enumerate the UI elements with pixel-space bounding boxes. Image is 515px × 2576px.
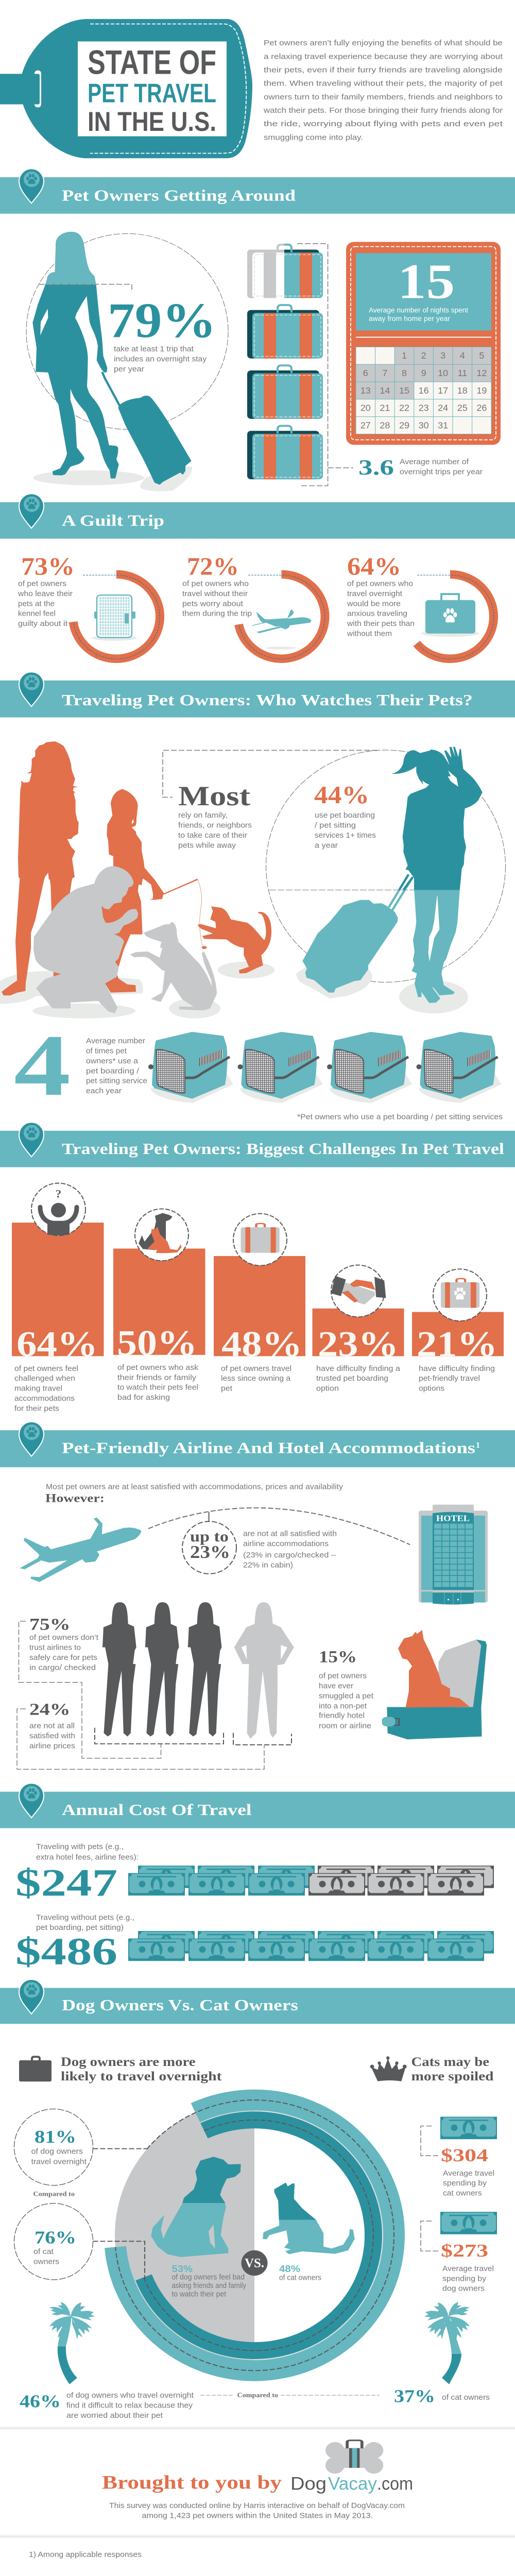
stat: 15 percent smuggled: friendly hotel: [319, 1711, 365, 1720]
guilt stat: 73 percent with kennel: [18, 552, 160, 659]
stat: 24 percent: 24%: [29, 1700, 71, 1719]
callout: 44 percent use pet boarding: a year: [315, 841, 338, 850]
guilt stat: 73 percent with kennel: who leave their: [18, 589, 73, 598]
stat: 46 percent compared to 37 percent: [20, 2386, 490, 2420]
stat: 53 percent of dog owners: asking friends and family: [172, 2281, 246, 2290]
luggage tag title: IN THE U.S.: [88, 107, 216, 137]
subheading: cats may be more spoiled: [370, 2055, 494, 2083]
label: compared to: Compared to: [33, 2190, 75, 2197]
intro text: their pets, even if their furry friends are traveling alongside: [264, 66, 503, 74]
callout: 44 percent use pet boarding: 44%: [314, 781, 369, 809]
guilt stat: 72 percent with plane: them during the trip: [182, 609, 252, 618]
guilt stat: 64 percent with pet carrier: 64%: [347, 552, 401, 580]
cat owners spending: 304 dollars: Average travel: [443, 2169, 494, 2178]
survey methodology: [109, 2501, 405, 2520]
callout: 76 percent of cat owners: 76%: [35, 2227, 76, 2247]
guilt stat: 72 percent with plane: [182, 552, 325, 659]
bar: 23 percent trusted boarding: have difficulty finding a: [316, 1364, 401, 1373]
stat: 15 percent smuggled: into a non-pet: [319, 1702, 367, 1710]
stat: 4 pet boarding uses: each year: [86, 1087, 122, 1095]
section heading: annual cost of travel: Annual Cost Of Travel: [62, 1801, 252, 1819]
callout: 81 percent of dog owners: 81%: [35, 2126, 76, 2147]
callout: 81 percent of dog owners: of dog owners: [31, 2147, 83, 2156]
calendar: 15 nights: 24: [438, 403, 448, 413]
stat: 15 percent smuggled: 15%: [319, 1648, 357, 1667]
stat: 79 percent: includes an overnight stay: [114, 355, 207, 363]
section heading: airline and hotel accommodations: 1: [476, 1441, 480, 1450]
calendar: 15 nights: 11: [457, 368, 467, 378]
bar: 48 percent travel less: of pet owners travel: [221, 1364, 291, 1373]
palm tree right: [424, 2302, 470, 2384]
subheading: cats may be more spoiled: more spoiled: [411, 2069, 494, 2083]
bar: 50 percent feel bad asking: [113, 1209, 205, 1402]
calendar: 15 nights: 19: [476, 385, 487, 396]
stat: 75 percent: trust airlines to: [29, 1643, 81, 1652]
calendar: 15 nights: 6: [363, 368, 368, 378]
bar: 50 percent feel bad asking: of pet owners who ask: [117, 1363, 198, 1372]
intro: however: [45, 1483, 343, 1505]
icon: airplane: [20, 1518, 141, 1582]
calendar: 15 nights: 27: [360, 420, 371, 430]
four pet crates: [148, 1032, 502, 1103]
stat: 53 percent of dog owners: of dog owners feel bad: [172, 2273, 245, 2281]
stat: 4 pet boarding uses: owners* use a: [86, 1057, 139, 1065]
guilt stat: 64 percent with pet carrier: travel overnight: [347, 589, 403, 598]
credit: brought to you by dogvacay: Brought to you by: [102, 2472, 282, 2493]
dog owners spending: 273 dollars: $273: [441, 2241, 488, 2261]
calendar: 15 nights: 20: [360, 403, 371, 413]
subheading: dog owners travel overnight: likely to travel overnight: [61, 2069, 222, 2083]
intro text: Pet owners aren’t fully enjoying the benefits of what should be: [264, 39, 503, 47]
stat: 46 percent compared to 37 percent: of cat owners: [442, 2393, 490, 2402]
guilt stat: 72 percent with plane: of pet owners who: [182, 580, 249, 588]
callout: 76 percent of cat owners: of cat: [33, 2247, 54, 2256]
guilt stat: 64 percent with pet carrier: of pet owners who: [347, 580, 413, 588]
section heading: dog owners vs cat owners: Dog Owners Vs. Cat Owners: [62, 1996, 298, 2014]
stat: 15 percent smuggled: [319, 1648, 374, 1731]
bar: 23 percent trusted boarding: trusted pet boarding: [316, 1374, 388, 1383]
calendar: 15 nights: [346, 242, 501, 445]
section heading: pet owners getting around: [0, 169, 515, 214]
stat: 15 percent smuggled: smuggled a pet: [319, 1692, 374, 1700]
guilt stat: 73 percent with kennel: pets at the: [18, 600, 55, 608]
calendar: 15 nights: 5: [479, 350, 485, 361]
stat: 79 percent: 79%: [108, 293, 216, 348]
bar: 50 percent feel bad asking: their friends or family: [117, 1374, 196, 1382]
intro: however: However:: [45, 1492, 105, 1505]
stat: 15 percent smuggled: have ever: [319, 1682, 353, 1690]
stat: 53 percent of dog owners: [172, 2263, 246, 2298]
calendar: 15 nights: Average number of nights spent: [369, 307, 468, 314]
section heading: annual cost of travel: [0, 1783, 515, 1828]
calendar: 15 nights: 4: [460, 350, 465, 361]
calendar: 15 nights: 22: [399, 403, 409, 413]
callout: 44 percent use pet boarding: services 1+ times: [315, 831, 376, 840]
bar: 21 percent pet-friendly options: options: [419, 1384, 444, 1393]
callout: most rely on family: friends, or neighbors: [178, 821, 252, 830]
callout: most rely on family: pets while away: [178, 841, 236, 850]
stat: 79 percent: per year: [114, 365, 144, 374]
calendar: 15 nights: 3: [440, 350, 445, 361]
survey methodology: This survey was conducted online by Harris interactive on behalf of DogVacay.com: [109, 2501, 405, 2510]
flight arc with up to 23 percent callout: [148, 1508, 410, 1574]
stat: 15 percent smuggled: room or airline: [319, 1722, 371, 1731]
calendar: 15 nights: 21: [380, 403, 390, 413]
stat: 4 pet boarding uses: 4: [14, 1017, 71, 1114]
intro text: them. When traveling without their pets, the majority of pet: [264, 79, 503, 88]
section heading: a guilt trip: A Guilt Trip: [62, 512, 164, 529]
luggage tag title: STATE OF: [88, 43, 216, 81]
stat: 3.6 trips: [358, 455, 483, 480]
icon: dog in open suitcase: [382, 1630, 487, 1739]
cost with pets: 247 dollars: [15, 1842, 494, 1904]
flight arc with up to 23 percent callout: airline accommodations: [243, 1539, 329, 1548]
stat: 46 percent compared to 37 percent: Compared to: [237, 2392, 278, 2399]
stat: 4 pet boarding uses: [14, 1017, 147, 1114]
guilt stat: 72 percent with plane: pets worry about: [182, 600, 244, 608]
guilt stat: 64 percent with pet carrier: [347, 552, 494, 659]
calendar: 15 nights: 31: [438, 420, 448, 430]
survey methodology: among 1,423 pet owners within the United States in May 2013.: [142, 2512, 373, 2520]
cost with pets: 247 dollars: Traveling with pets (e.g.,: [36, 1842, 124, 1851]
guilt stat: 73 percent with kennel: kennel feel: [18, 609, 56, 618]
calendar: 15 nights: 25: [457, 403, 468, 413]
luggage tag title: PET TRAVEL: [88, 78, 216, 108]
logo icon: bone suitcase: [325, 2441, 383, 2473]
intro text: owners turn to their family members, friends and neighbors to: [264, 93, 503, 101]
guilt stat: 73 percent with kennel: of pet owners: [18, 580, 66, 588]
bar: 64 percent challenged: [12, 1183, 104, 1413]
callout: 81 percent of dog owners: [14, 2109, 147, 2185]
callout: 44 percent use pet boarding: use pet boarding: [315, 811, 375, 820]
subheading: cats may be more spoiled: Cats may be: [411, 2055, 489, 2069]
bar: 23 percent trusted boarding: 23%: [318, 1325, 399, 1364]
stat: 24 percent: airline prices: [29, 1742, 75, 1750]
calendar: 15 nights: 7: [382, 368, 387, 378]
stat: 48 percent of cat owners: of cat owners: [279, 2274, 321, 2282]
cat owners spending: 304 dollars: [421, 2117, 497, 2198]
calendar: 15 nights: 2: [421, 350, 426, 361]
subheading: dog owners travel overnight: [19, 2055, 222, 2083]
calendar: 15 nights: 16: [419, 385, 429, 396]
cat owners spending: 304 dollars: spending by: [443, 2179, 487, 2188]
stat: 24 percent: are not at all: [29, 1722, 75, 1731]
calendar: 15 nights: 29: [399, 420, 409, 430]
bar: 50 percent feel bad asking: bad for asking: [117, 1393, 170, 1402]
section heading: a guilt trip: [0, 494, 515, 539]
bar: 50 percent feel bad asking: 50%: [117, 1324, 197, 1363]
stat: 24 percent: [29, 1700, 75, 1750]
calendar: 15 nights: 10: [438, 368, 448, 378]
stat: 75 percent: in cargo/ checked: [29, 1663, 96, 1672]
stat: 46 percent compared to 37 percent: 46%: [20, 2391, 61, 2411]
stat: 24 percent: satisfied with: [29, 1732, 75, 1740]
icon: hotel: [419, 1505, 488, 1604]
footnote: among applicable responses: 1) Among applicable responses: [29, 2550, 142, 2559]
bar: 64 percent challenged: ?: [56, 1188, 61, 1200]
cat owners spending: 304 dollars: cat owners: [443, 2189, 482, 2198]
footnote: pet owners: *Pet owners who use a pet boarding / pet sitting services: [297, 1113, 503, 1121]
stat: 75 percent: [29, 1615, 99, 1672]
callout: 81 percent of dog owners: travel overnight: [31, 2158, 87, 2166]
section heading: who watches their pets: Traveling Pet Owners: Who Watches Their Pets?: [62, 691, 473, 709]
stat: 53 percent of dog owners: to watch their pet: [172, 2290, 227, 2298]
stat: 48 percent of cat owners: [279, 2263, 321, 2282]
bar: 64 percent challenged: challenged when: [14, 1374, 75, 1383]
callout: most rely on family: to take care of their: [178, 831, 247, 840]
subheading: dog owners travel overnight: Dog owners are more: [61, 2055, 196, 2069]
calendar: 15 nights: 28: [380, 420, 390, 430]
bar: 64 percent challenged: for their pets: [14, 1404, 59, 1413]
section heading: pet owners getting around: Pet Owners Getting Around: [62, 187, 296, 204]
bar: 48 percent travel less: less since owning a: [221, 1374, 291, 1383]
calendar: 15 nights: 17: [438, 385, 448, 396]
callout: most rely on family: [163, 750, 377, 850]
circular chart: dog vs cat: [115, 2100, 394, 2370]
section heading: who watches their pets: [0, 672, 515, 717]
four women pictogram: [17, 1602, 294, 1769]
credit: brought to you by dogvacay: .com: [377, 2473, 413, 2494]
callout: 76 percent of cat owners: owners: [33, 2258, 59, 2266]
cost without pets: 486 dollars: $486: [15, 1930, 117, 1973]
intro: however: Most pet owners are at least satisfied with accommodations, prices and availability: [46, 1483, 343, 1491]
flight arc with up to 23 percent callout: up to: [190, 1529, 229, 1545]
guilt stat: 64 percent with pet carrier: without them: [347, 630, 392, 638]
flight arc with up to 23 percent callout: 23%: [190, 1542, 230, 1562]
guilt stat: 73 percent with kennel: guilty about it: [18, 619, 68, 628]
stat: 4 pet boarding uses: pet boarding /: [86, 1067, 140, 1075]
calendar: 15 nights: 15: [399, 385, 409, 396]
bar: 21 percent pet-friendly options: have difficulty finding: [419, 1364, 495, 1373]
bar: 50 percent feel bad asking: to watch their pets feel: [117, 1383, 198, 1392]
stat: 46 percent compared to 37 percent: are worried about their pet: [66, 2411, 163, 2420]
calendar: 15 nights: 26: [476, 403, 487, 413]
stat: 48 percent of cat owners: 48%: [279, 2263, 300, 2274]
stat: 4 pet boarding uses: Average number: [86, 1037, 145, 1045]
intro text: smuggling come into play.: [264, 133, 363, 142]
stat: 75 percent: safely care for pets: [29, 1653, 97, 1662]
guilt stat: 64 percent with pet carrier: would be more: [347, 600, 401, 608]
woman with rolling suitcase illustration: [26, 232, 228, 491]
stat: 75 percent: 75%: [29, 1615, 71, 1634]
intro text: the ride, worrying about flying with pets and even pet: [264, 120, 503, 128]
palm tree left: [49, 2302, 95, 2384]
calendar: 15 nights: away from home per year: [369, 315, 450, 323]
flight arc with up to 23 percent callout: (23% in cargo/checked –: [243, 1551, 336, 1560]
dog owners spending: 273 dollars: Average travel: [442, 2264, 494, 2273]
icon: hotel: HOTEL: [436, 1514, 470, 1523]
intro text: [263, 39, 503, 142]
section heading: airline and hotel accommodations: [0, 1422, 515, 1467]
bar: 48 percent travel less: 48%: [221, 1325, 302, 1364]
bar: 23 percent trusted boarding: option: [316, 1384, 339, 1393]
dog owners spending: 273 dollars: [421, 2212, 497, 2293]
calendar: 15 nights: 12: [476, 368, 487, 378]
calendar: 15 nights: 30: [419, 420, 429, 430]
stat: 53 percent of dog owners: 53%: [172, 2263, 193, 2274]
guilt stat: 64 percent with pet carrier: with their pets than: [347, 619, 415, 628]
stat: 15 percent smuggled: of pet owners: [319, 1672, 367, 1681]
calendar: 15 nights: 13: [360, 385, 371, 396]
stat: 4 pet boarding uses: pet sitting service: [86, 1077, 147, 1086]
calendar: 15 nights: 23: [419, 403, 429, 413]
family with pets illustration: [0, 741, 274, 1019]
bar: 21 percent pet-friendly options: [412, 1269, 504, 1393]
callout: most rely on family: Most: [178, 781, 251, 811]
calendar: 15 nights: 1: [402, 350, 407, 361]
dog owners spending: 273 dollars: dog owners: [442, 2284, 485, 2293]
stat: 75 percent: of pet owners don’t: [29, 1633, 99, 1642]
credit: brought to you by dogvacay: Dog: [290, 2473, 327, 2494]
section heading: biggest challenges: Traveling Pet Owners: Biggest Challenges In Pet Travel: [62, 1140, 504, 1158]
bar: 64 percent challenged: 64%: [16, 1325, 98, 1364]
cost with pets: 247 dollars: $247: [15, 1861, 117, 1904]
callout: 76 percent of cat owners: [14, 2204, 145, 2281]
cat owners spending: 304 dollars: $304: [441, 2145, 488, 2165]
suitcases: 3.6 overnight trips: [247, 244, 353, 486]
guilt stat: 73 percent with kennel: 73%: [21, 552, 75, 580]
stat: 3.6 trips: overnight trips per year: [400, 468, 483, 476]
credit: brought to you by dogvacay: Vacay: [328, 2473, 377, 2494]
stat: 46 percent compared to 37 percent: 37%: [394, 2386, 435, 2406]
stat: 79 percent: take at least 1 trip that: [114, 345, 194, 353]
stat: 46 percent compared to 37 percent: find it difficult to relax because they: [66, 2401, 193, 2410]
circular chart: dog vs cat: VS.: [245, 2256, 264, 2270]
bar: 48 percent travel less: pet: [221, 1384, 233, 1393]
calendar: 15 nights: 8: [402, 368, 407, 378]
guilt stat: 72 percent with plane: 72%: [187, 552, 239, 580]
credit: brought to you by dogvacay: [102, 2472, 413, 2494]
callout: most rely on family: rely on family,: [178, 811, 228, 820]
callout: 44 percent use pet boarding: / pet sitting: [315, 821, 356, 830]
intro text: watch their pets. For those bringing their furry friends along for: [263, 106, 503, 115]
stat: 3.6 trips: Average number of: [400, 457, 469, 466]
bar: 64 percent challenged: of pet owners feel: [14, 1364, 78, 1373]
callout: 44 percent use pet boarding: [314, 781, 376, 850]
bar: 64 percent challenged: accommodations: [14, 1394, 75, 1403]
section heading: biggest challenges: [0, 1122, 515, 1167]
section heading: airline and hotel accommodations: Pet-Friendly Airline And Hotel Accommodations: [62, 1439, 475, 1457]
calendar: 15 nights: 14: [380, 385, 390, 396]
stat: 46 percent compared to 37 percent: of dog owners who travel overnight: [66, 2391, 194, 2400]
calendar: 15 nights: 9: [421, 368, 426, 378]
stat: 79 percent: [108, 293, 216, 374]
guilt stat: 64 percent with pet carrier: anxious traveling: [347, 609, 407, 618]
traveller waving with suitcase illustration: [266, 747, 506, 1013]
flight arc with up to 23 percent callout: are not at all satisfied with: [243, 1530, 337, 1538]
intro text: a relaxing travel experience because they are worrying about: [264, 53, 503, 61]
section heading: dog owners vs cat owners: [0, 1979, 515, 2024]
bar: 48 percent travel less: [214, 1214, 305, 1393]
flight arc with up to 23 percent callout: 22% in cabin): [243, 1561, 293, 1570]
cost without pets: 486 dollars: Traveling without pets (e.g.,: [36, 1913, 134, 1922]
bar: 64 percent challenged: making travel: [14, 1384, 62, 1393]
cost without pets: 486 dollars: [15, 1913, 494, 1973]
stat: 4 pet boarding uses: of times pet: [86, 1047, 127, 1056]
calendar: 15 nights: 18: [457, 385, 468, 396]
bar: 23 percent trusted boarding: [312, 1265, 404, 1393]
stat: 3.6 trips: 3.6: [358, 455, 394, 480]
calendar: 15 nights: 15: [398, 254, 455, 309]
cost without pets: 486 dollars: pet boarding, pet sitting): [36, 1923, 124, 1932]
bar: 21 percent pet-friendly options: pet-friendly travel: [419, 1374, 480, 1383]
dog owners spending: 273 dollars: spending by: [442, 2275, 486, 2283]
guilt stat: 72 percent with plane: travel without their: [182, 589, 248, 598]
luggage tag title: [0, 19, 252, 158]
cost with pets: 247 dollars: extra hotel fees, airline fees):: [36, 1853, 139, 1861]
bar: 21 percent pet-friendly options: 21%: [417, 1325, 497, 1364]
